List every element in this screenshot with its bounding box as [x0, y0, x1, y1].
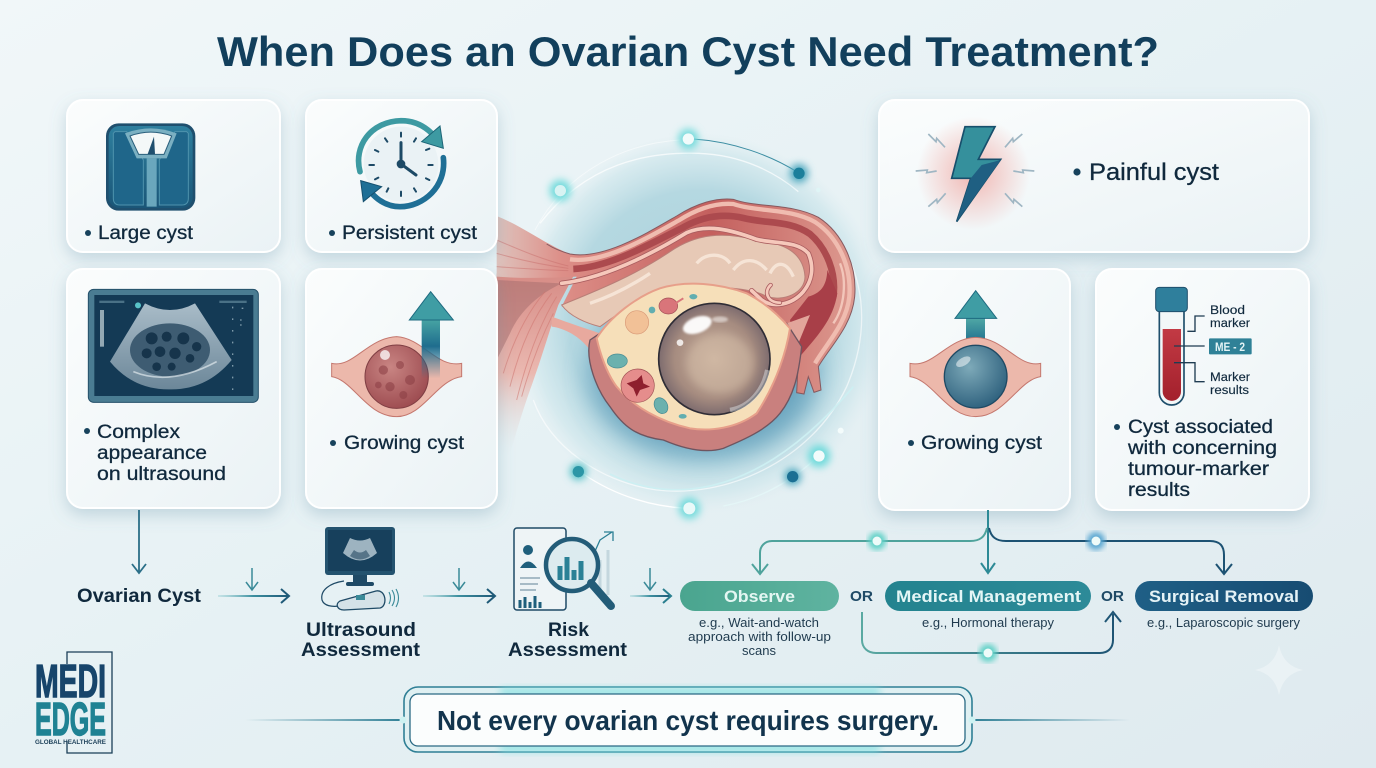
option: observe: scans [742, 644, 776, 658]
marker labels: ME - 2 [1215, 340, 1245, 354]
option: medical management: Medical Management [896, 587, 1081, 606]
label: or: OR [850, 588, 873, 605]
bullet text: with concerning [1127, 437, 1277, 459]
lower-left tube [497, 270, 577, 457]
icon: lightning bolt [916, 117, 1034, 230]
bullet text: Cyst associated [1128, 416, 1273, 438]
central ovary illustration [497, 129, 887, 519]
inner folds [562, 235, 805, 327]
arrow: to risk assessment [423, 568, 495, 603]
label: ovarian cyst: Ovarian Cyst [77, 586, 202, 607]
icon: blood test tube [1156, 287, 1252, 405]
label: or: OR [1101, 588, 1124, 605]
orbit rings and nodes [533, 129, 862, 519]
marker labels: Blood [1210, 305, 1245, 317]
ovary inner stroma [597, 284, 790, 430]
option: observe [680, 581, 839, 658]
decorative sparkle [1255, 645, 1303, 695]
bullet text: Painful cyst [1089, 159, 1219, 186]
logo: mediedge [35, 652, 112, 753]
marker labels: Marker [1210, 372, 1250, 384]
option: surgical removal [1135, 581, 1313, 630]
icon: ultrasound machine [322, 527, 398, 610]
panel: persistent cyst [306, 100, 497, 252]
option: surgical removal: e.g., Laparoscopic surgery [1147, 616, 1301, 630]
label: ultrasound assessment: Ultrasound [306, 619, 416, 641]
icon: clock with arrows [359, 121, 444, 207]
option: surgical removal: Surgical Removal [1149, 587, 1299, 606]
bullet text: Growing cyst [921, 433, 1043, 454]
bullet text: Persistent cyst [342, 223, 478, 244]
large cyst sphere [659, 303, 770, 415]
panel: large cyst [67, 100, 280, 252]
blue halo [513, 133, 887, 513]
label: ultrasound assessment [301, 619, 421, 661]
bullet text: Growing cyst [344, 433, 465, 454]
fallopian tube mass [497, 199, 855, 394]
panel: painful cyst [879, 100, 1309, 252]
bullet text: appearance [97, 442, 207, 464]
option: medical management: e.g., Hormonal therapy [922, 616, 1055, 630]
panel: tumour markers [1096, 269, 1309, 510]
callout: key message [245, 687, 1130, 752]
arrow: cards to ovarian cyst [132, 510, 146, 573]
icon: growing cyst with arrow [332, 292, 462, 417]
left flare streaks [497, 240, 568, 271]
branching arrows [752, 510, 1232, 653]
panel: growing cyst (left) [306, 269, 497, 508]
follicles [607, 294, 697, 419]
arrow: to ultrasound [218, 568, 289, 603]
bullet text: Complex [97, 421, 180, 443]
label: ultrasound assessment: Assessment [301, 639, 421, 661]
callout: key message: Not every ovarian cyst requires surgery. [437, 705, 939, 736]
label: risk assessment: Assessment [508, 639, 628, 661]
title: When Does an Ovarian Cyst Need Treatment? [217, 28, 1159, 75]
bullet text [84, 421, 226, 485]
logo: mediedge: MEDI [35, 655, 106, 707]
bullet text: on ultrasound [97, 463, 226, 485]
marker labels: results [1210, 385, 1249, 397]
option: observe: approach with follow-up [688, 630, 831, 644]
icon: ultrasound screen [88, 289, 258, 402]
option: observe: Observe [724, 588, 795, 606]
bullet text: results [1128, 479, 1190, 501]
inner pink line and fimbria hook [562, 228, 812, 305]
branch nodes [868, 532, 1105, 662]
bullet text: Large cyst [98, 223, 194, 244]
tube outline [547, 199, 855, 394]
bullet text: tumour-marker [1128, 458, 1270, 480]
tube bands [570, 204, 850, 363]
panel: growing cyst (right) [879, 269, 1070, 510]
label: risk assessment: Risk [548, 619, 589, 641]
option: observe: e.g., Wait-and-watch [699, 616, 819, 630]
icon: cyst with up arrow [910, 291, 1041, 417]
bullet text [1114, 416, 1277, 501]
marker labels [1210, 305, 1250, 397]
logo: mediedge: GLOBAL HEALTHCARE [35, 739, 107, 746]
icon: weighing scale [106, 123, 195, 211]
arrow: to treatment options [630, 568, 671, 603]
panel: complex appearance [67, 269, 280, 508]
marker labels: marker [1210, 318, 1250, 330]
logo: mediedge: EDGE [35, 693, 106, 745]
label: risk assessment [508, 619, 628, 661]
ovarian ligaments [552, 317, 600, 350]
ovary outer rim [589, 323, 802, 451]
option: medical management [885, 581, 1091, 630]
icon: risk assessment report [514, 528, 613, 610]
